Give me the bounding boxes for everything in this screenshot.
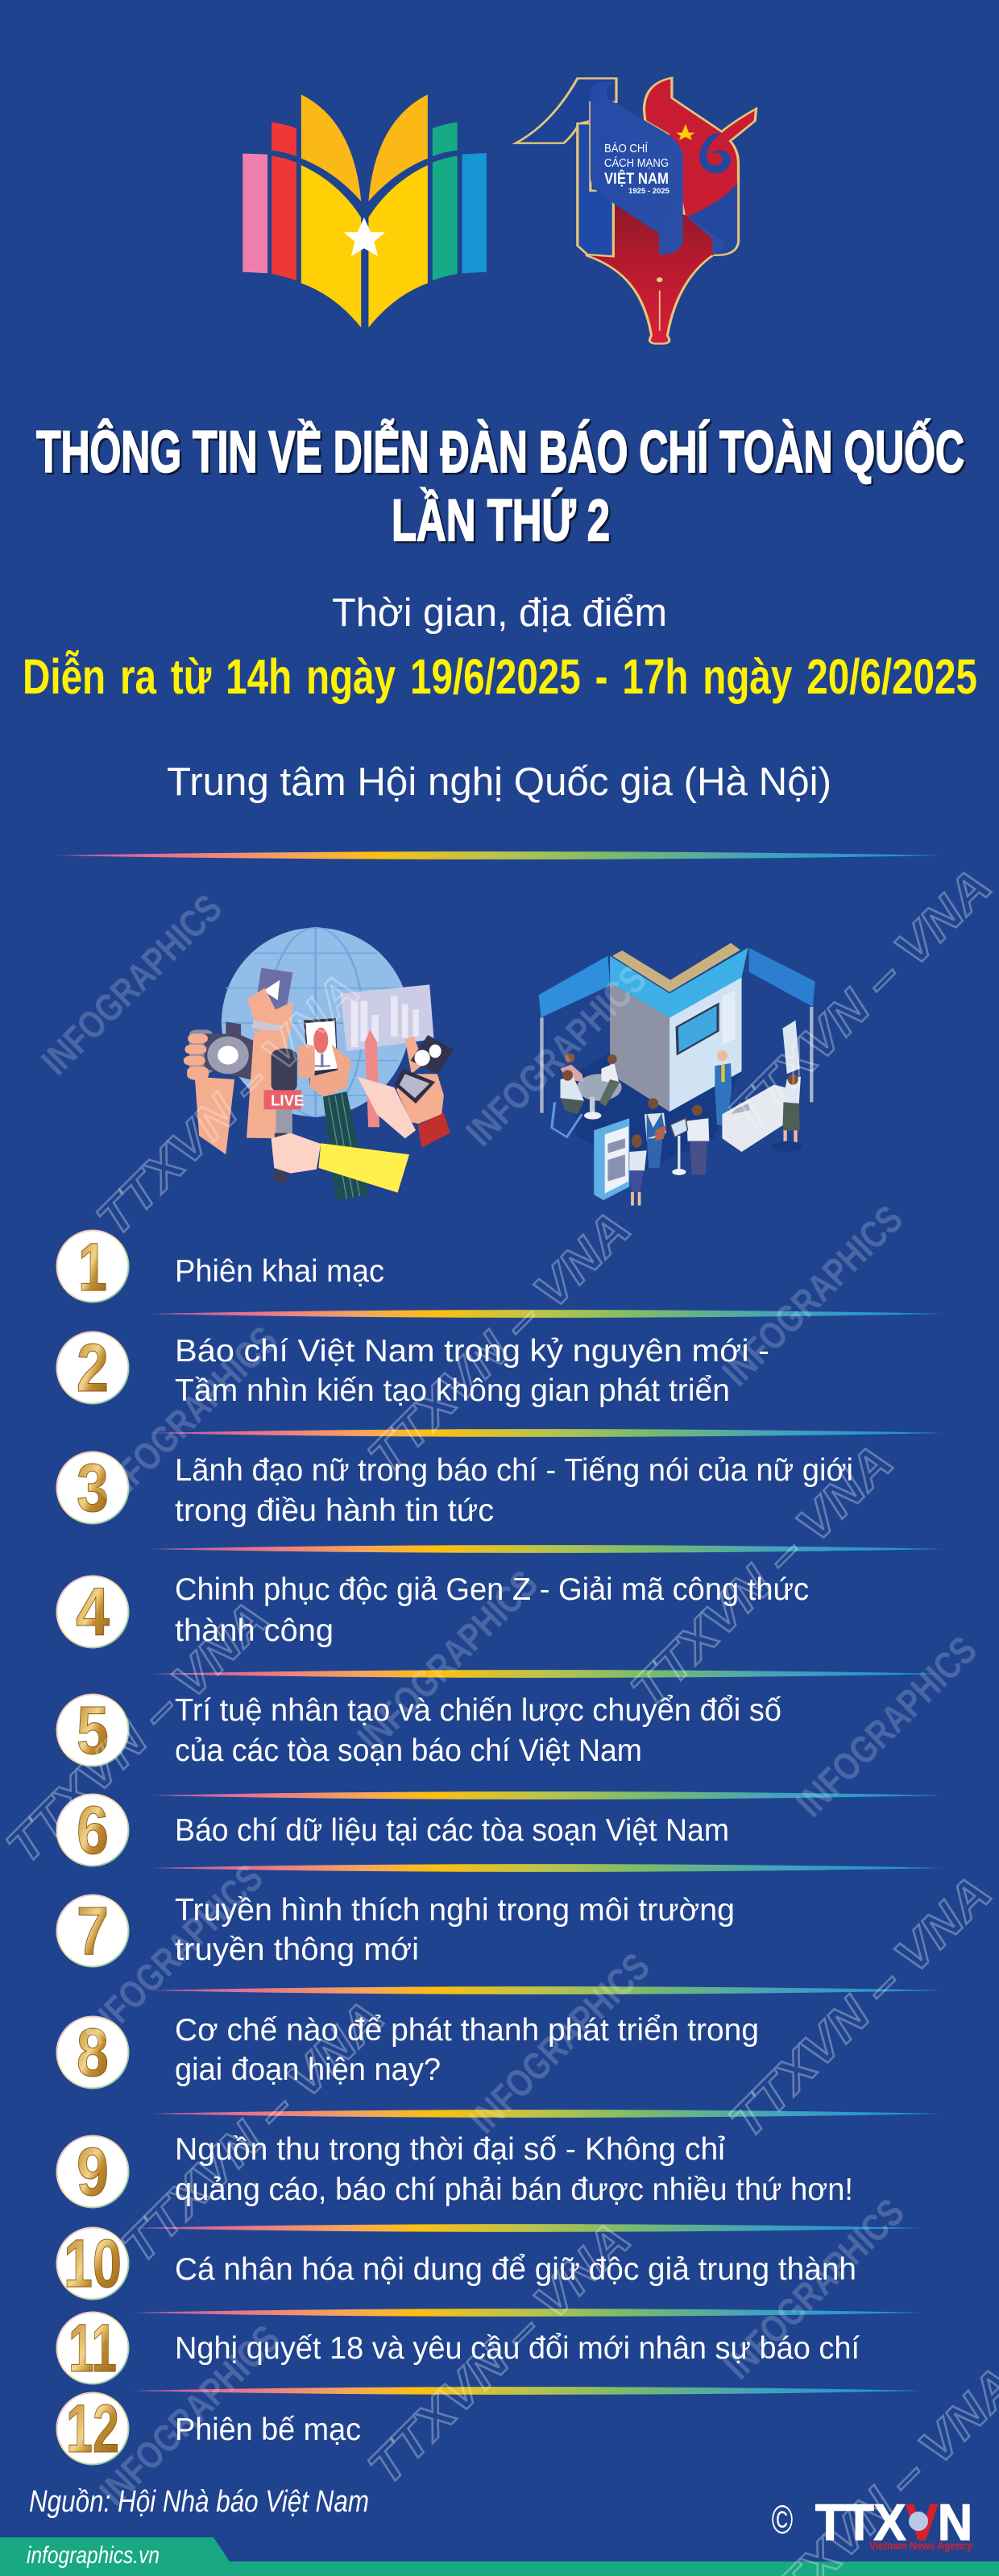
item 11: 11 [68,2310,117,2386]
watermarks: TTXVN – VNA [111,1990,394,2273]
watermarks: INFOGRAPHICS [350,1563,546,1759]
watermarks: INFOGRAPHICS [92,2317,288,2514]
source note: Nguồn: Hội Nhà báo Việt Nam [29,2485,369,2519]
watermarks: TTXVN – VNA [719,1866,999,2148]
watermarks: TTXVN – VNA [358,1201,640,1484]
illustration: press hands with globe [184,928,454,1200]
item 6: 6 [77,1792,109,1868]
reception desk [722,1074,802,1152]
item 3: trong điều hành tin tức [175,1493,494,1528]
item 5: của các tòa soạn báo chí Việt Nam [175,1733,642,1768]
footer bar [0,2537,999,2576]
item 7: truyền thông mới [175,1932,419,1967]
item 6 [56,1792,729,1868]
item 4: thành công [175,1613,334,1648]
item 8: 8 [77,2015,109,2090]
item 11 [56,2310,860,2386]
item 9: Nguồn thu trong thời đại số - Không chỉ [175,2132,725,2167]
item 12: 12 [66,2391,119,2466]
watermarks: INFOGRAPHICS [462,1945,658,2142]
item 10: 10 [64,2226,122,2301]
item 9: 9 [77,2134,109,2209]
venue: Trung tâm Hội nghị Quốc gia (Hà Nội) [167,760,831,804]
watermarks: INFOGRAPHICS [75,1857,272,2053]
logo caption: BÁO CHÍ [604,142,649,155]
logo: TTXVN: Vietnam News Agency [869,2539,972,2552]
panel: agenda list [56,1229,943,2466]
item 3 [56,1450,853,1528]
item 5: Trí tuệ nhân tạo và chiến lược chuyển đổi số [175,1693,781,1728]
item 4: Chinh phục độc giả Gen Z - Giải mã công thức [175,1572,809,1607]
item 1: Phiên khai mạc [175,1254,384,1289]
live tag: LIVE [271,1091,304,1108]
watermarks: TTXVN – VNA [620,1435,903,1717]
logo caption: 1925 - 2025 [628,187,669,195]
item 3: Lãnh đạo nữ trong báo chí - Tiếng nói của nữ giới [175,1453,853,1488]
logo caption [604,142,669,195]
item 8: giai đoạn hiện nay? [175,2052,441,2087]
title: LẦN THỨ 2 [392,488,610,553]
item 1 [56,1229,384,1305]
title [36,419,964,553]
visitors [645,1098,709,1175]
item 9 [56,2132,853,2209]
logo caption: CÁCH MẠNG [604,156,669,170]
item 4: 4 [76,1574,110,1650]
watermarks: INFOGRAPHICS [458,958,655,1154]
illustration: exhibition booth [539,943,815,1206]
item 3: 3 [77,1450,109,1526]
watermarks: TTXVN – VNA [358,2212,640,2495]
item 10 [56,2226,856,2301]
item 8: Cơ chế nào để phát thanh phát triển trong [175,2013,759,2048]
logo: TTXVN: © [772,2498,793,2542]
item 1: 1 [78,1229,107,1305]
logo: 100 years of revolutionary press [516,78,757,344]
item 2 [56,1330,769,1408]
watermarks: TTXVN – VNA [0,1591,279,1874]
logo: forum book [242,94,487,328]
item 5 [56,1692,781,1768]
logo: TTXVN: TTXVN [815,2495,972,2551]
watermarks: INFOGRAPHICS [715,1198,911,1394]
item 9: quảng cáo, báo chí phải bán được nhiều thứ hơn! [175,2172,853,2207]
item 12: Phiên bế mạc [175,2412,361,2447]
item 10: Cá nhân hóa nội dung để giữ độc giả trung thành [175,2252,856,2287]
watermarks: INFOGRAPHICS [89,1319,286,1515]
item 12 [56,2391,361,2466]
watermarks: INFOGRAPHICS [716,2191,913,2388]
watermarks: TTXVN – VNA [86,963,369,1246]
item 7 [56,1893,735,1969]
item 7: 7 [77,1893,109,1969]
footer bar: infographics.vn [27,2542,160,2569]
item 2: 2 [77,1330,109,1406]
item 2: Báo chí Việt Nam trong kỷ nguyên mới - [175,1334,769,1369]
item 2: Tầm nhìn kiến tạo không gian phát triển [175,1373,730,1408]
item 6: Báo chí dữ liệu tại các tòa soạn Việt Nam [175,1813,729,1848]
item 7: Truyền hình thích nghi trong môi trường [175,1893,735,1928]
item 4 [56,1572,809,1650]
watermarks: INFOGRAPHICS [34,887,230,1083]
watermarks [0,859,999,2576]
kiosk [594,1118,647,1206]
meeting table [552,1053,622,1137]
item 5: 5 [77,1692,109,1768]
item 8 [56,2013,759,2090]
logo caption: VIỆT NAM [604,170,669,188]
watermarks: TTXVN – VNA [719,859,999,1141]
subtitle: time and place: Thời gian, địa điểm [332,591,667,635]
item 11: Nghị quyết 18 và yêu cầu đổi mới nhân sự báo chí [175,2331,860,2366]
presenter [715,1050,732,1125]
